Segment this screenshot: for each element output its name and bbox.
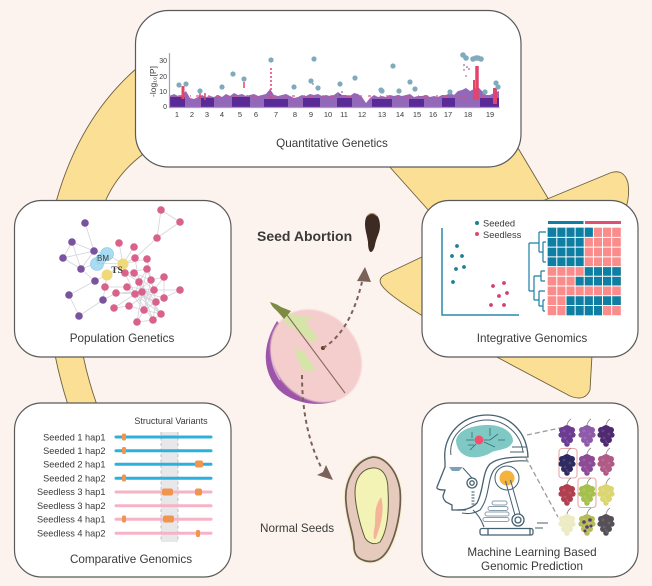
panel: machine learning (422, 403, 638, 577)
legend: Seedless (483, 230, 522, 240)
haplotype labels: Seedless 3 hap2 (37, 501, 106, 511)
fruit axis line (287, 315, 345, 393)
haplotype labels: Seedless 4 hap2 (37, 528, 106, 538)
network graph (59, 206, 184, 326)
haplotype labels: Seeded 1 hap1 (43, 432, 106, 442)
highlight frames (559, 448, 596, 508)
icon: normal seed (344, 455, 402, 563)
panel: population genetics (14, 200, 231, 357)
heading (467, 546, 597, 573)
chromosome labels: 12 (358, 110, 366, 119)
chromosome labels: 16 (429, 110, 437, 119)
normal seeds label: Normal Seeds (260, 522, 334, 535)
chromosome labels: 7 (274, 110, 278, 119)
y axis labels: 10 (159, 89, 167, 96)
dashed connector lines (526, 428, 560, 517)
heading: Quantitative Genetics (276, 137, 388, 150)
chromosome labels: 9 (309, 110, 313, 119)
haplotype alignment chart (116, 432, 211, 542)
node label BM: BM (97, 254, 109, 263)
heading: Population Genetics (70, 332, 174, 345)
heading: Integrative Genomics (477, 332, 587, 345)
legend (475, 218, 522, 240)
chromosome labels: 15 (413, 110, 421, 119)
chromosome labels: 2 (190, 110, 194, 119)
haplotype labels: Seeded 1 hap2 (43, 446, 106, 456)
heading: Genomic Prediction (481, 560, 583, 573)
haplotype labels (37, 432, 106, 538)
y axis labels (159, 58, 167, 111)
heatmap with dendrogram (529, 221, 622, 316)
panel: integrative genomics (422, 200, 638, 357)
chromosome labels: 3 (205, 110, 209, 119)
chromosome labels: 13 (378, 110, 386, 119)
chromosome labels: 5 (238, 110, 242, 119)
chromosome labels: 17 (444, 110, 452, 119)
chromosome labels: 6 (254, 110, 258, 119)
icon: robot head (437, 415, 548, 535)
arrow: to normal seeds (302, 375, 333, 480)
chromosome labels: 8 (293, 110, 297, 119)
panel: quantitative genetics (136, 10, 521, 167)
cycle arrow band (55, 68, 629, 405)
chromosome labels: 11 (340, 110, 348, 119)
seed abortion label: Seed Abortion (257, 228, 352, 244)
chromosome labels: 19 (486, 110, 494, 119)
y axis labels: 30 (159, 58, 167, 65)
icon: halved grape fruit (251, 291, 381, 421)
panel: comparative genomics (14, 403, 231, 577)
y axis labels: 0 (163, 104, 167, 111)
y axis title: -log₁₀[P] (148, 66, 158, 97)
haplotype labels: Seeded 2 hap2 (43, 474, 106, 484)
arrow: to seed abortion (323, 267, 371, 348)
y axis labels: 20 (159, 74, 167, 81)
grape variety grid (558, 419, 615, 536)
haplotype labels: Seeded 2 hap1 (43, 460, 106, 470)
chromosome labels: 10 (324, 110, 332, 119)
chromosome labels: 14 (396, 110, 404, 119)
chromosome labels: 1 (175, 110, 179, 119)
node label TS: TS (111, 266, 123, 276)
heading: Comparative Genomics (70, 553, 192, 566)
scatter plot (442, 228, 519, 315)
legend: Seeded (483, 218, 515, 228)
fruit stem (270, 302, 291, 319)
manhattan plot (170, 52, 501, 108)
haplotype labels: Seedless 4 hap1 (37, 514, 106, 524)
haplotype labels: Seedless 3 hap1 (37, 487, 106, 497)
chromosome labels: 4 (220, 110, 224, 119)
chromosome labels (175, 110, 494, 119)
chromosome labels: 18 (464, 110, 472, 119)
icon: aborted seed (365, 213, 380, 252)
ovule (321, 346, 325, 350)
structural variants label: Structural Variants (134, 416, 208, 426)
heading: Machine Learning Based (467, 546, 597, 559)
